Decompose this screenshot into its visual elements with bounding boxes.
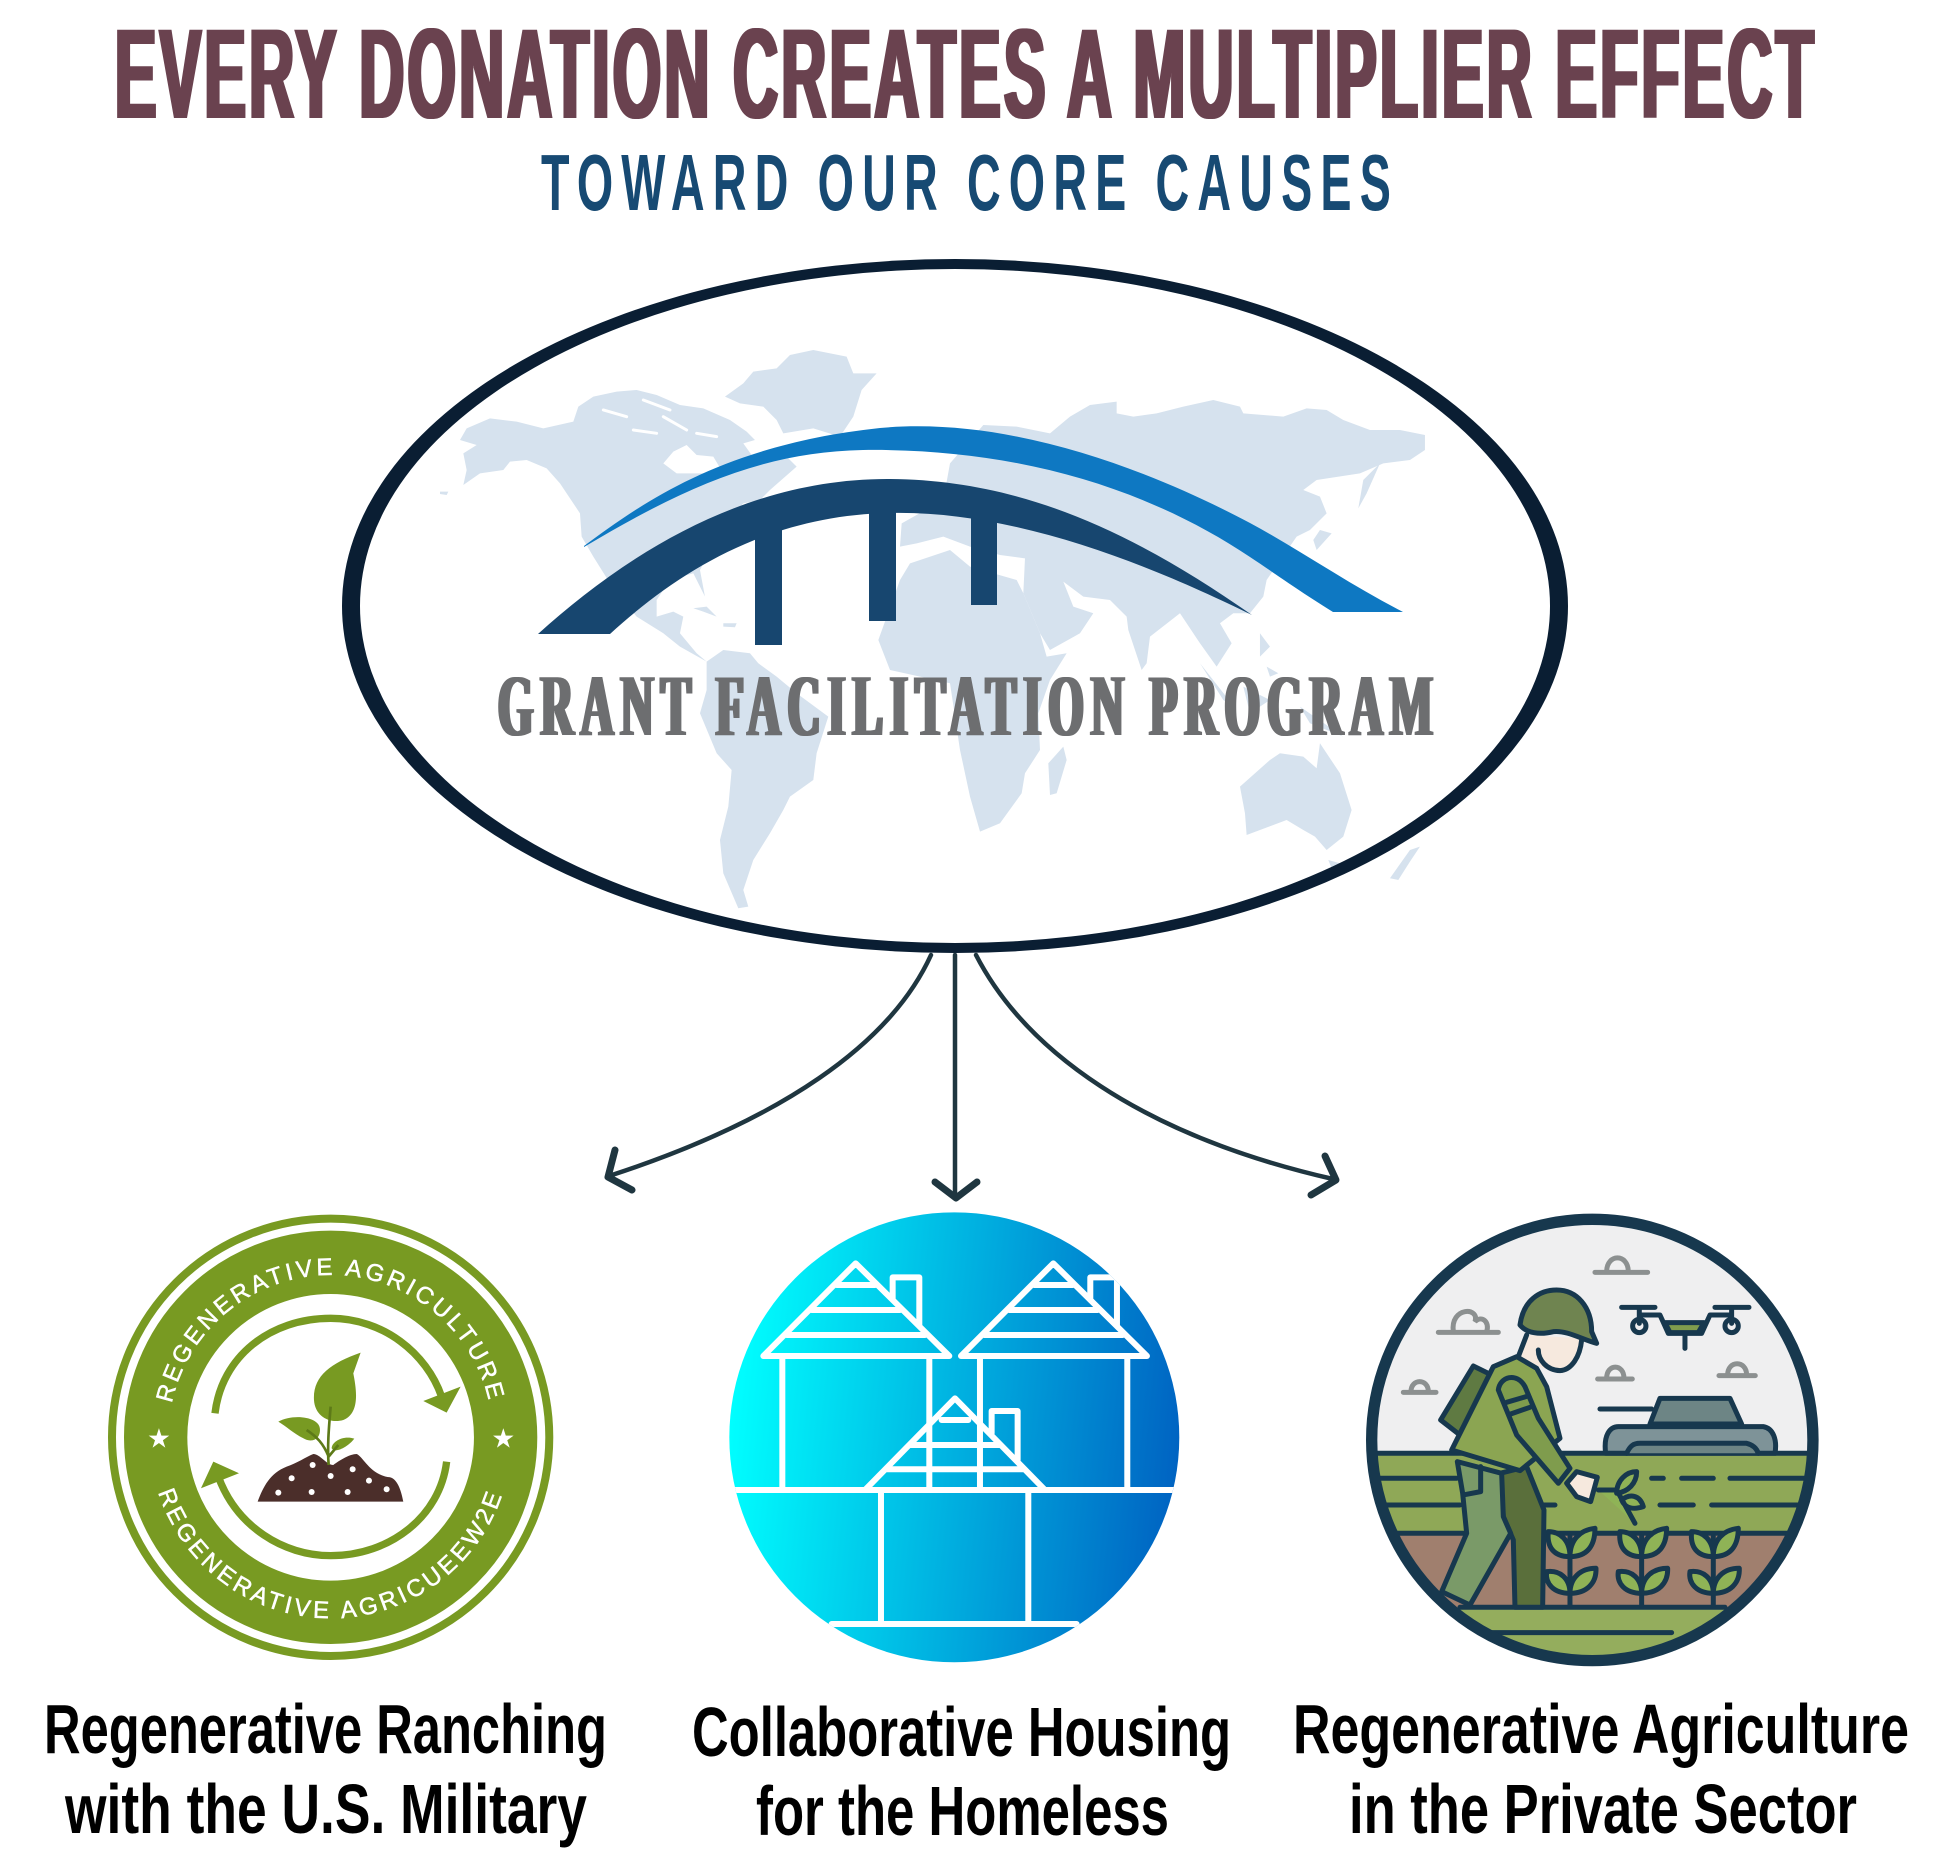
houses [735,1263,1175,1624]
ground [1367,1453,1820,1667]
crops [1546,1528,1739,1605]
soldier [1441,1290,1643,1607]
caption: regenerative agriculture [1293,1690,1909,1848]
arrow: center [935,955,977,1198]
caption: collaborative housing: Collaborative Housing [692,1693,1231,1771]
world map [440,350,1425,908]
tank [1600,1398,1776,1453]
caption: collaborative housing [692,1693,1231,1850]
caption: regenerative ranching: Regenerative Ranching [44,1690,607,1768]
icon ring [1372,1219,1813,1661]
icon: regenerative agriculture badge: ★ [491,1423,515,1454]
arrows [608,955,1336,1198]
arrow: left [608,955,931,1190]
icon: regenerative agriculture badge [108,1214,554,1660]
oval outline [342,259,1568,953]
cycle arrows [201,1318,461,1556]
seedling and soil [258,1353,403,1502]
icon: soldier in field [1367,1219,1820,1667]
drone [1622,1307,1749,1348]
clouds [1403,1258,1755,1392]
arrow: right [976,955,1336,1195]
caption: regenerative ranching [44,1690,607,1848]
caption: regenerative ranching: with the U.S. Military [64,1770,587,1848]
bridge arch logo [538,426,1403,645]
caption: collaborative housing: for the Homeless [756,1772,1169,1850]
panel: grant facilitation program logo [342,259,1568,953]
icon: regenerative agriculture badge: ★ [147,1423,171,1454]
icon: collaborative housing [729,1212,1179,1662]
icon: regenerative agriculture badge: REGENERATIVE AGRICULTURE [156,1258,504,1402]
icon: regenerative agriculture badge: REGENERATIVE AGRICUEEW2E [158,1488,502,1618]
